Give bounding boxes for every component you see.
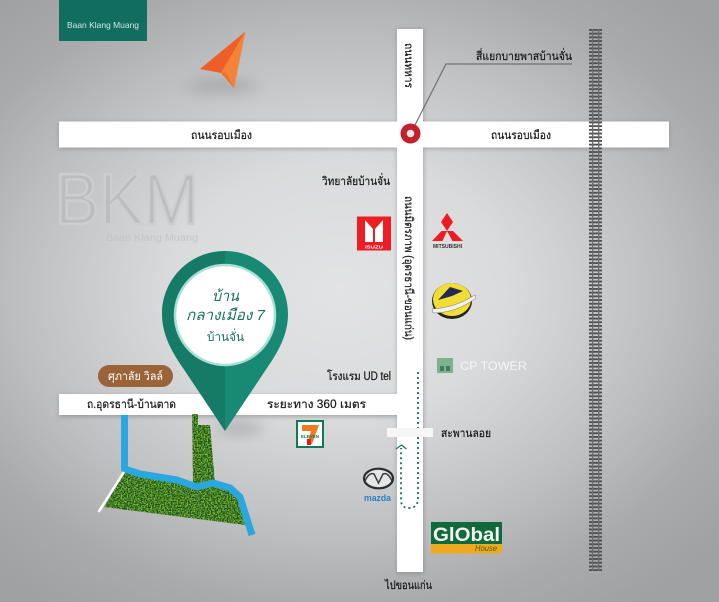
icon: junction marker (400, 124, 420, 144)
river (124, 415, 252, 535)
label: UD tel hotel: โรงแรม UD tel (327, 369, 391, 383)
land plot (98, 410, 252, 535)
logo: Mazda: mazda (364, 493, 392, 503)
location pin: บ้านจั่น (207, 328, 244, 344)
logo: Mazda (364, 469, 393, 503)
logo: Global House: GlObal (433, 525, 500, 546)
callout: Ban Chan bypass junction (415, 48, 572, 125)
logo: Isuzu: ISUZU (365, 244, 383, 250)
railway rails (592, 29, 599, 571)
logo: CP Tower: CP TOWER (460, 359, 527, 373)
road: ring road (59, 122, 669, 148)
label: Ban Chan college: วิทยาลัยบ้านจั่น (322, 173, 390, 188)
label: Supalai Ville (98, 365, 173, 387)
dotted route arrow (396, 372, 418, 508)
watermark: BKM: Baan Klang Muang (106, 233, 198, 244)
watermark: BKM: BKM (55, 160, 199, 240)
label: to Khon Kaen: ไปขอนแก่น (384, 579, 432, 592)
logo: 7-Eleven (296, 420, 324, 448)
logo: Isuzu (357, 216, 391, 250)
icon: north arrow (186, 32, 258, 92)
logo: CP Tower (437, 358, 527, 373)
railway (589, 29, 602, 571)
label: Udon Thani - Ban Tat road: ถ.อุดรธานี-บ้านตาด (87, 398, 176, 411)
overpass (387, 428, 433, 437)
label: Supalai Ville: ศุภาลัย วิลล์ (108, 369, 163, 383)
plot boundary (98, 472, 124, 512)
label: Mittraphap road: ถนนมิตรภาพ (อุดรธานี-ขอนแก่น) (402, 196, 415, 340)
logo: Mitsubishi: MITSUBISHI (433, 244, 462, 250)
logo: Global House (431, 522, 502, 554)
road: vertical main road (397, 29, 423, 572)
logo tab: Baan Klang Muang (59, 0, 147, 41)
pin text: บ้าน (212, 288, 240, 305)
logo: yellow badge (432, 283, 476, 319)
label: ring road left: ถนนรอบเมือง (191, 129, 252, 142)
label: ring road right: ถนนรอบเมือง (491, 129, 551, 142)
logo: 7-Eleven: ELEVEN (301, 434, 319, 439)
label: overpass: สะพานลอย (441, 428, 491, 440)
location pin (160, 249, 290, 433)
location pin: กลางเมือง 7 (186, 307, 266, 324)
road: Udon Thani - Ban Tat (59, 394, 397, 415)
logo: Global House: House (475, 544, 498, 553)
label: Thahan road: ถนนทหาร (402, 43, 414, 88)
logo tab: Baan Klang Muang: Baan Klang Muang (67, 20, 139, 30)
callout: Ban Chan bypass junction: สี่แยกบายพาสบ้านจั่น (476, 48, 572, 63)
logo: Mitsubishi (432, 213, 463, 250)
road shadows (59, 29, 669, 574)
label: distance: ระยะทาง 360 เมตร (267, 399, 366, 411)
